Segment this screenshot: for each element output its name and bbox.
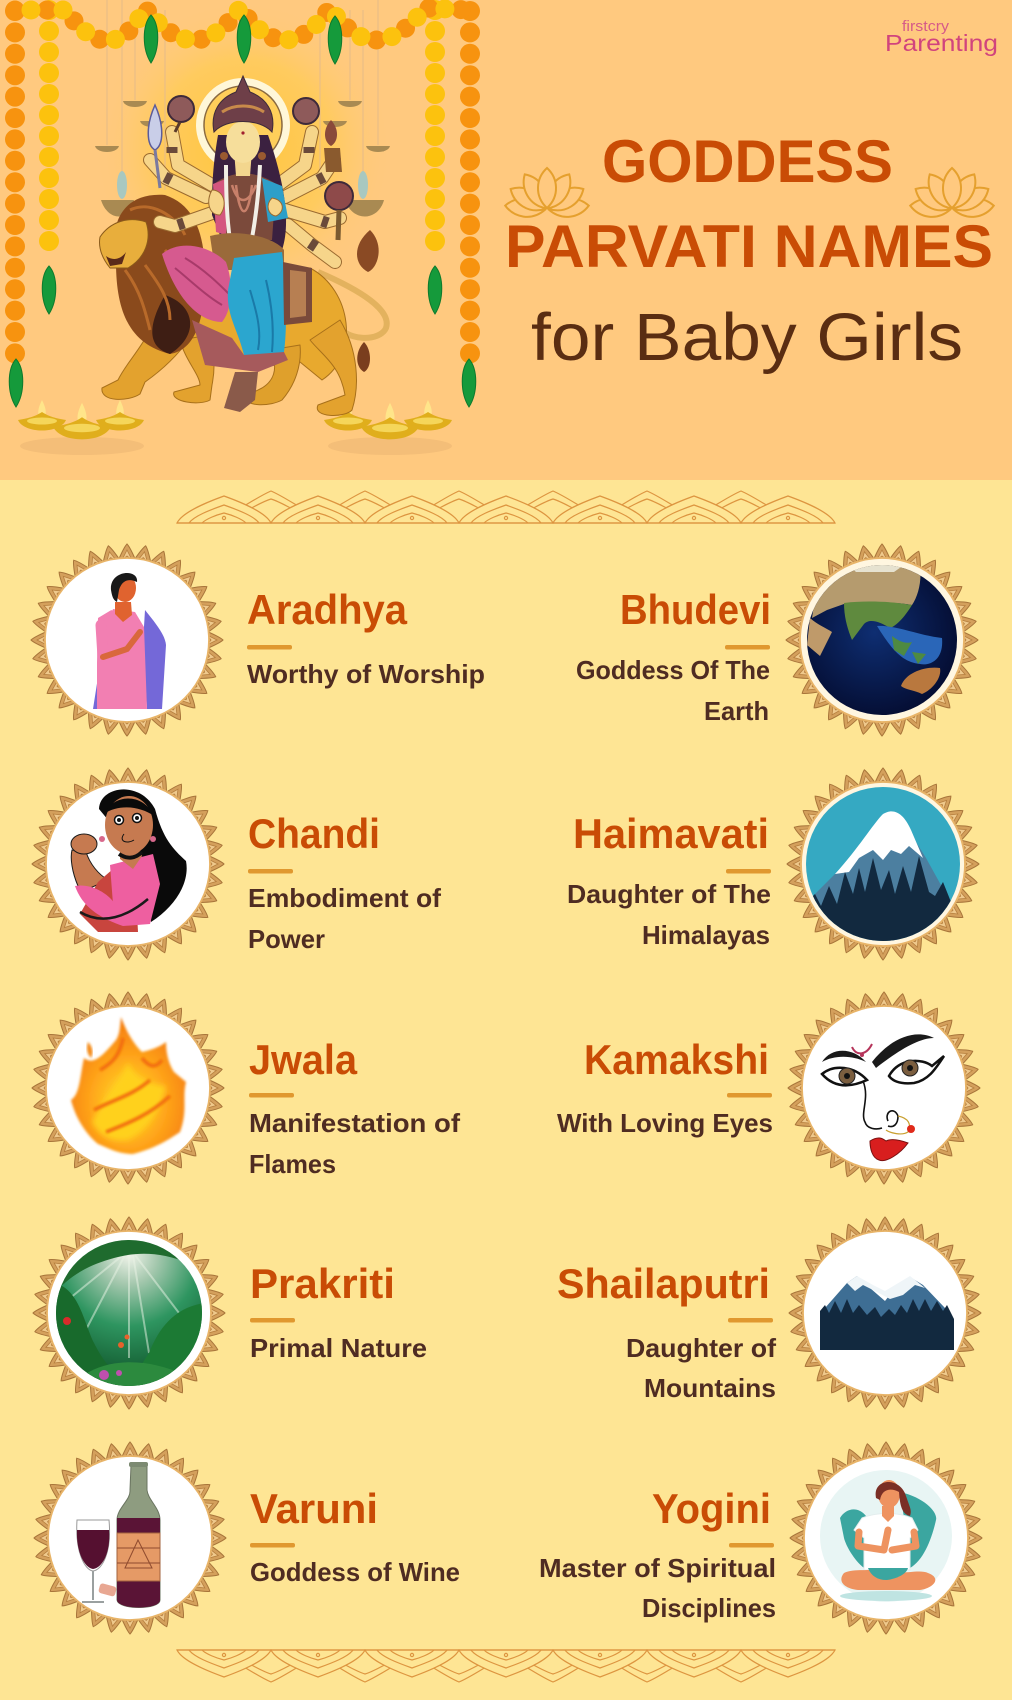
title: PARVATI NAMES: [505, 213, 993, 280]
halo: [196, 78, 290, 172]
meaning: Primal Nature: [250, 1333, 427, 1363]
underline: [248, 869, 293, 874]
icon: strong woman: [17, 753, 239, 975]
meaning line 2: Power: [248, 924, 325, 954]
name: Yogini: [652, 1485, 771, 1532]
item: Haimavati: [568, 767, 980, 961]
underline: [727, 1093, 772, 1098]
lotus right: [909, 168, 995, 219]
meaning line 2: Flames: [249, 1149, 336, 1179]
diyas: [18, 400, 452, 455]
icon: wine bottle and glass: [19, 1427, 241, 1649]
title: GODDESS: [602, 128, 893, 195]
name: Prakriti: [250, 1260, 395, 1307]
underline: [250, 1318, 295, 1322]
meaning: Daughter of The: [567, 879, 771, 909]
icon: goddess face: [773, 977, 995, 1199]
underline: [247, 645, 292, 650]
title: for Baby Girls: [531, 300, 963, 375]
name: Aradhya: [247, 586, 408, 633]
icon: flame: [17, 977, 239, 1199]
title: [505, 128, 993, 375]
name: Jwala: [249, 1036, 358, 1083]
meaning line 2: Earth: [704, 696, 769, 726]
meaning: Goddess of Wine: [250, 1557, 460, 1587]
item: Jwala: [17, 977, 460, 1199]
meaning: With Loving Eyes: [557, 1108, 773, 1138]
bottom decorative border: [177, 1650, 835, 1682]
underline: [249, 1093, 294, 1098]
item: Shailaputri: [557, 1202, 996, 1424]
icon: earth globe: [785, 543, 979, 737]
meaning: Manifestation of: [249, 1108, 460, 1138]
icon: snowy mountain: [786, 767, 980, 961]
item: Aradhya: [16, 529, 485, 751]
mango leaves: [9, 15, 476, 407]
underline: [250, 1543, 295, 1548]
top decorative border: [177, 491, 835, 523]
garlands: [15, 8, 470, 355]
icon: forest: [32, 1216, 226, 1410]
logo: firstcry: [902, 18, 950, 35]
lion: [99, 195, 387, 415]
meaning line 2: Disciplines: [642, 1593, 776, 1623]
meaning line 2: Mountains: [644, 1373, 776, 1403]
underline: [725, 645, 770, 650]
underline: [726, 869, 771, 874]
meaning line 2: Himalayas: [642, 920, 770, 950]
item: Bhudevi: [577, 543, 979, 737]
underline: [728, 1318, 773, 1322]
item: Kamakshi: [557, 977, 995, 1199]
meaning: Daughter of: [626, 1333, 776, 1363]
goddess figure: [162, 76, 312, 412]
icon: mountain range: [774, 1202, 996, 1424]
icon: meditating woman: [775, 1427, 997, 1649]
item: Prakriti: [32, 1216, 426, 1410]
name: Bhudevi: [620, 586, 771, 633]
held attributes: [148, 96, 353, 240]
logo: [885, 18, 998, 56]
decorative glow: [93, 0, 393, 300]
hanging lamps: [95, 0, 390, 216]
item: Yogini: [539, 1427, 997, 1649]
name: Varuni: [250, 1485, 378, 1532]
icon: praying woman: [16, 529, 238, 751]
illustration: goddess on lion with garlands: [9, 0, 476, 455]
name: Haimavati: [573, 810, 769, 857]
item: Chandi: [17, 753, 441, 975]
meaning: Worthy of Worship: [247, 659, 485, 689]
meaning: Goddess Of The: [576, 655, 770, 685]
name: Shailaputri: [557, 1260, 770, 1307]
name: Kamakshi: [584, 1036, 769, 1083]
item: Varuni: [19, 1427, 460, 1649]
meaning: Master of Spiritual: [539, 1553, 776, 1583]
meaning: Embodiment of: [248, 883, 441, 913]
header panel: [0, 0, 1012, 480]
underline: [729, 1543, 774, 1548]
arms: [150, 132, 340, 262]
name: Chandi: [248, 810, 380, 857]
lotus left: [504, 168, 590, 219]
logo: Parenting: [885, 30, 998, 56]
